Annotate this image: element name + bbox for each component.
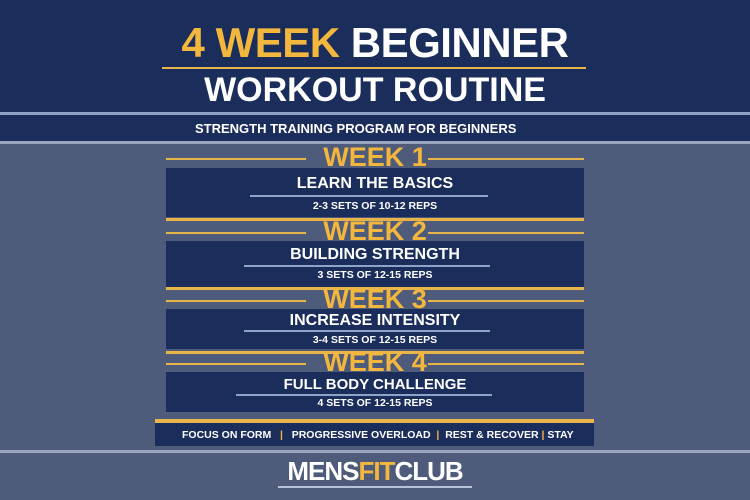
week 4: 4 SETS OF 12-15 REPS: [318, 397, 432, 409]
title line 2: WORKOUT ROUTINE: [204, 71, 546, 109]
week 3: [166, 284, 584, 354]
subtitle band: [0, 115, 750, 141]
week 1: [166, 142, 584, 221]
week 3: 3-4 SETS OF 12-15 REPS: [313, 334, 437, 346]
logo: MENSFITCLUB: [287, 456, 463, 486]
subtitle: STRENGTH TRAINING PROGRAM FOR BEGINNERS: [195, 121, 516, 136]
week 4: FULL BODY CHALLENGE: [284, 376, 466, 393]
tips bar: [155, 419, 594, 446]
title line 1: 4 WEEK BEGINNER: [182, 19, 568, 66]
week 4 heading: WEEK 4: [323, 347, 427, 377]
week 1: LEARN THE BASICS: [297, 175, 453, 192]
week 1: 2-3 SETS OF 10-12 REPS: [313, 200, 437, 212]
week 3: INCREASE INTENSITY: [290, 312, 460, 329]
week 2: 3 SETS OF 12-15 REPS: [318, 269, 432, 281]
week 2: BUILDING STRENGTH: [290, 246, 460, 263]
week 2: [166, 216, 584, 290]
week 4: [166, 347, 584, 412]
week 1 heading: WEEK 1: [323, 142, 427, 172]
header band: [0, 0, 750, 112]
week 3 heading: WEEK 3: [323, 284, 427, 314]
week 2 heading: WEEK 2: [323, 216, 427, 246]
tips bar: FOCUS ON FORM | PROGRESSIVE OVERLOAD | REST & RECOVER | STAY: [182, 429, 574, 441]
